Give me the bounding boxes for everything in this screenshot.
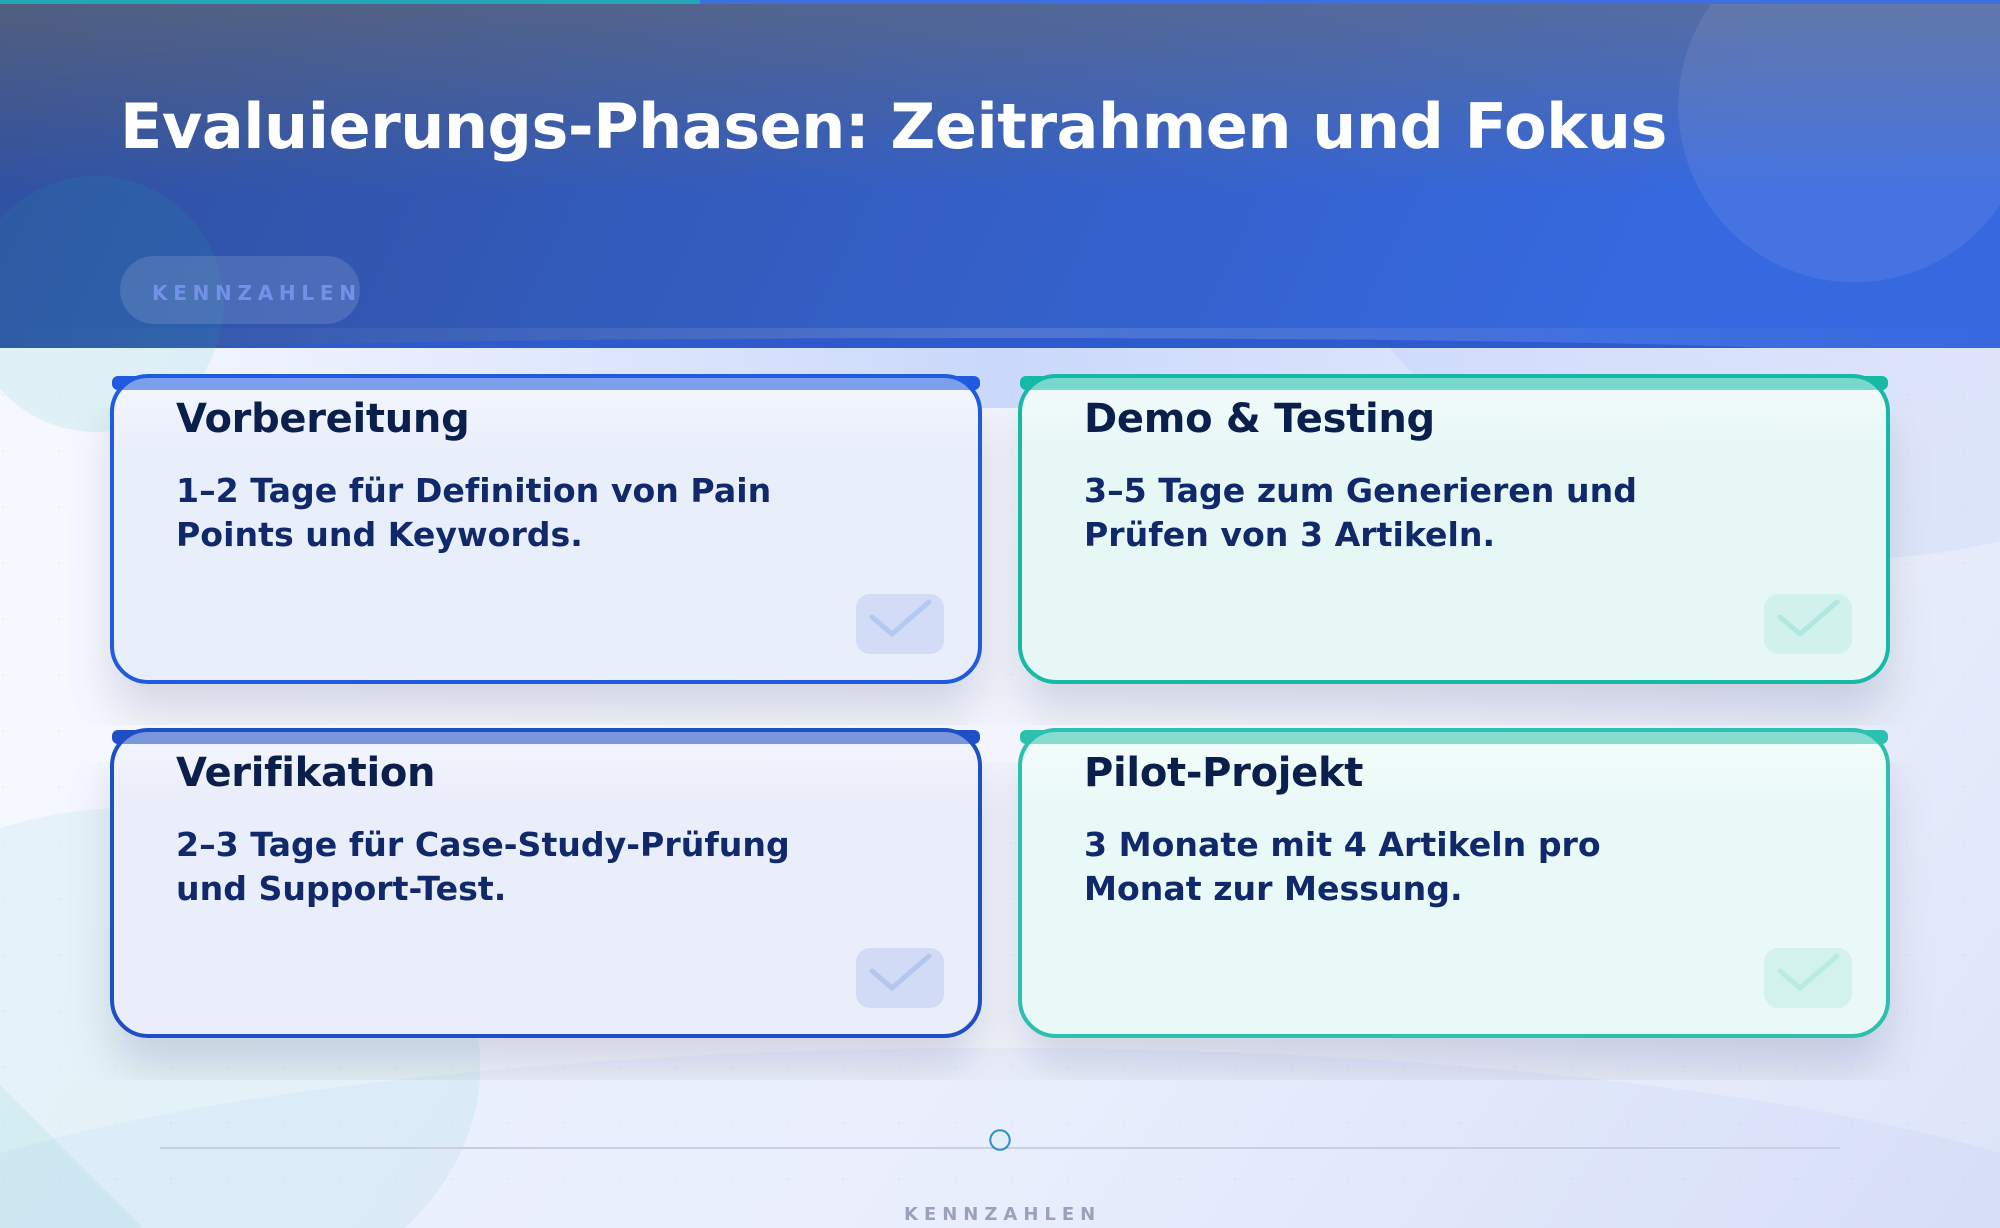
panel: Vorbereitung [112,376,980,682]
body text: Monat zur Messung. [1084,869,1463,908]
body text: und Support-Test. [176,869,506,908]
body text [1084,471,1637,554]
decorative teal circle [0,176,224,432]
icon: check [1764,948,1852,1008]
body text: Prüfen von 3 Artikeln. [1084,515,1495,554]
title: Evaluierungs-Phasen: Zeitrahmen und Fokus [120,90,1667,163]
body text: 1–2 Tage für Definition von Pain [176,471,771,510]
header pill: KENNZAHLEN: KENNZAHLEN [152,281,362,305]
body text: 3–5 Tage zum Generieren und [1084,471,1637,510]
body text: 3 Monate mit 4 Artikeln pro [1084,825,1601,864]
icon: check [856,948,944,1008]
body text [176,825,790,908]
card shadows row 2 [112,762,1888,1068]
body text: Points und Keywords. [176,515,583,554]
icon: check [856,594,944,654]
panel: Demo & Testing [1020,376,1888,682]
panel: Verifikation [112,730,980,1036]
heading: Demo & Testing [1084,396,1435,442]
top accent bar [0,0,2000,4]
panel: Pilot-Projekt [1020,730,1888,1036]
heading: Verifikation [176,750,435,796]
footer label: KENNZAHLEN [904,1204,1101,1225]
body text [1084,825,1601,908]
footer divider with node [160,1130,1840,1150]
body text: 2–3 Tage für Case-Study-Prüfung [176,825,790,864]
card shadows row 1 [112,408,1888,714]
heading: Vorbereitung [176,396,469,442]
heading: Pilot-Projekt [1084,750,1363,796]
header pill: KENNZAHLEN [120,256,362,324]
icon: check [1764,594,1852,654]
body text [176,471,771,554]
header banner [0,0,2000,348]
